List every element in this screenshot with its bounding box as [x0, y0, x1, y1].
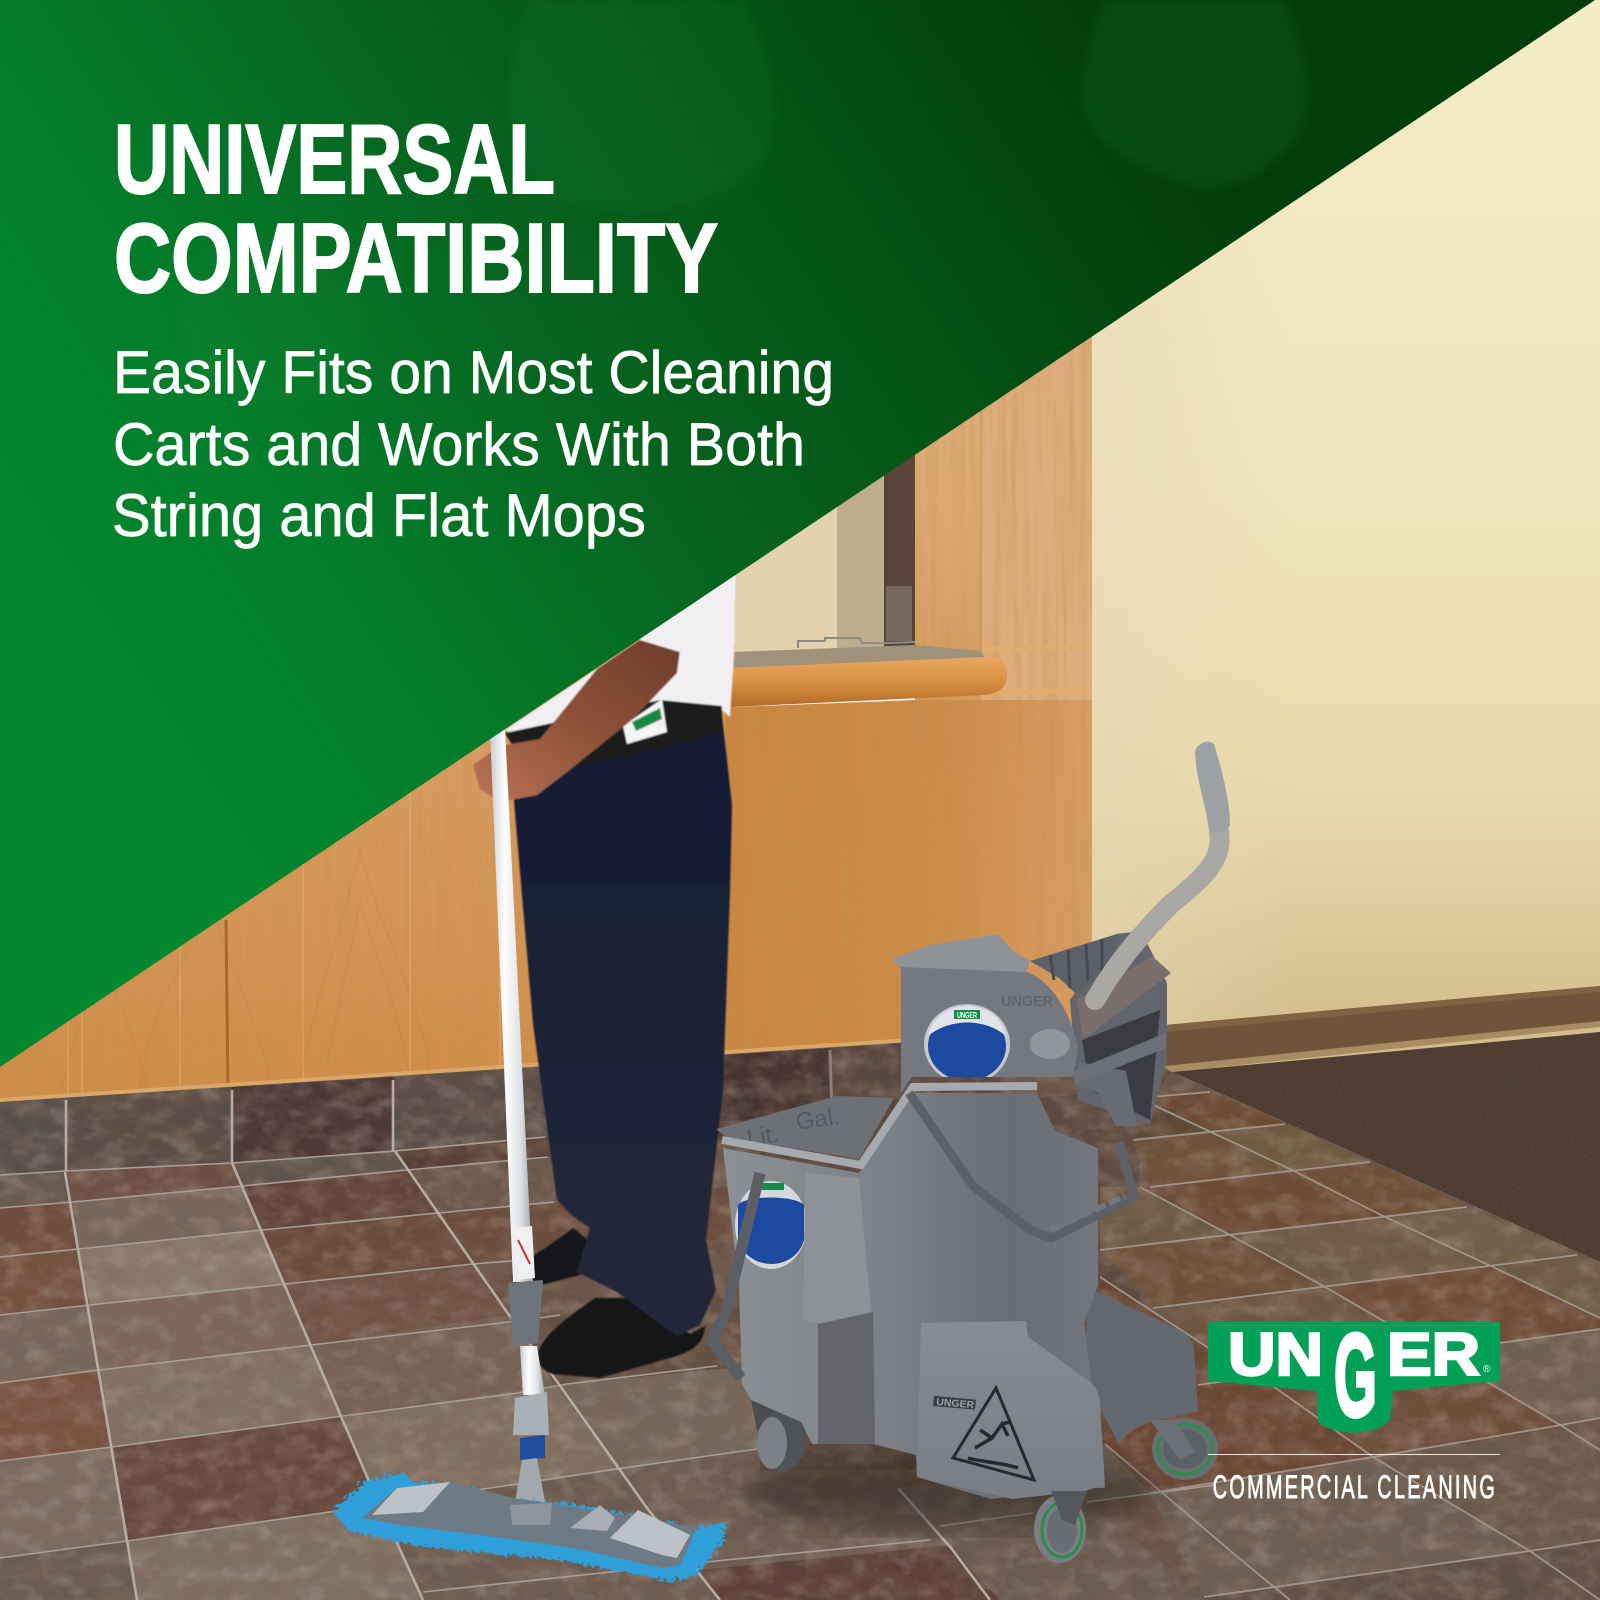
main tank [723, 1093, 1105, 1499]
molded caution triangle [933, 1388, 1034, 1480]
worker [473, 575, 735, 1378]
wainscot tiles [0, 1037, 1000, 1175]
floor shadow under bucket [740, 1450, 1160, 1530]
right tile grid [1100, 1070, 1600, 1600]
arm and hand [473, 640, 680, 802]
carpet [1172, 1032, 1600, 1262]
molded volume marks [745, 1103, 841, 1152]
molded volume marks: Lit. [745, 1121, 781, 1152]
white shirt [505, 575, 735, 745]
mop bucket and wringer [712, 742, 1230, 1563]
wringer handle [1095, 742, 1230, 1000]
bucket rim [722, 1086, 1037, 1165]
subtitle: Carts and Works With Both [113, 411, 805, 478]
logo wordmark: ER [1387, 1321, 1480, 1388]
tank inner wall [716, 1096, 894, 1159]
belt badge [623, 699, 667, 744]
sticker on wringer [924, 1004, 1010, 1084]
rear wheel [1150, 1418, 1218, 1480]
title: UNIVERSAL [114, 104, 555, 214]
wringer interior [1070, 931, 1167, 1125]
counter rail [730, 657, 1007, 707]
wringer grill [1030, 934, 1117, 994]
bail handle [909, 1093, 1134, 1238]
mop pole [490, 730, 549, 1515]
wringer pocket panel [803, 1173, 871, 1329]
back shoe [512, 1228, 600, 1288]
rear leg [1084, 1288, 1198, 1444]
wood counter panels [0, 300, 1095, 1110]
wringer handle linkage [1073, 956, 1171, 1126]
logo tagline: COMMERCIAL CLEANING [1213, 1469, 1495, 1505]
green diagonal banner [0, 0, 1595, 1067]
subtitle: String and Flat Mops [112, 482, 646, 549]
photo background: wall [1092, 0, 1600, 1073]
belt [505, 700, 722, 775]
left caster [751, 1400, 812, 1471]
wringer pivot knob [1030, 1029, 1070, 1059]
bucket left handle [712, 1173, 760, 1378]
molded caution triangle: UNGER [936, 1397, 975, 1411]
tiled floor [0, 1030, 1600, 1600]
logo wordmark: UN [1228, 1321, 1323, 1388]
subtitle: Easily Fits on Most Cleaning [113, 339, 834, 406]
molded logo: UNGER [1001, 993, 1053, 1010]
counter window opening [733, 450, 985, 668]
wringer front panel [901, 967, 1078, 1093]
sticker on wringer: UNGER [957, 1011, 977, 1020]
flat mop [333, 730, 727, 1581]
mop plate [362, 1482, 697, 1568]
logo wordmark: G [1334, 1310, 1377, 1442]
grout lines [0, 1050, 1600, 1600]
logo badge [1208, 1322, 1500, 1433]
title [114, 104, 718, 313]
logo wordmark [1228, 1310, 1491, 1442]
left sticker [735, 1181, 807, 1269]
molded volume marks: Gal. [794, 1103, 841, 1136]
subtitle [112, 339, 834, 549]
left tile grid [0, 1090, 1204, 1600]
front wheel [1034, 1491, 1087, 1563]
wringer frame top [892, 934, 1030, 974]
mop pad [333, 1472, 727, 1581]
logo: Unger Commercial Cleaning [1208, 1310, 1500, 1505]
trousers [513, 715, 732, 1336]
front shoe [538, 1298, 705, 1378]
caution foot panel [917, 1321, 1105, 1499]
logo wordmark: ® [1483, 1364, 1491, 1375]
title: COMPATIBILITY [114, 203, 718, 313]
shirt cuff [640, 575, 735, 665]
